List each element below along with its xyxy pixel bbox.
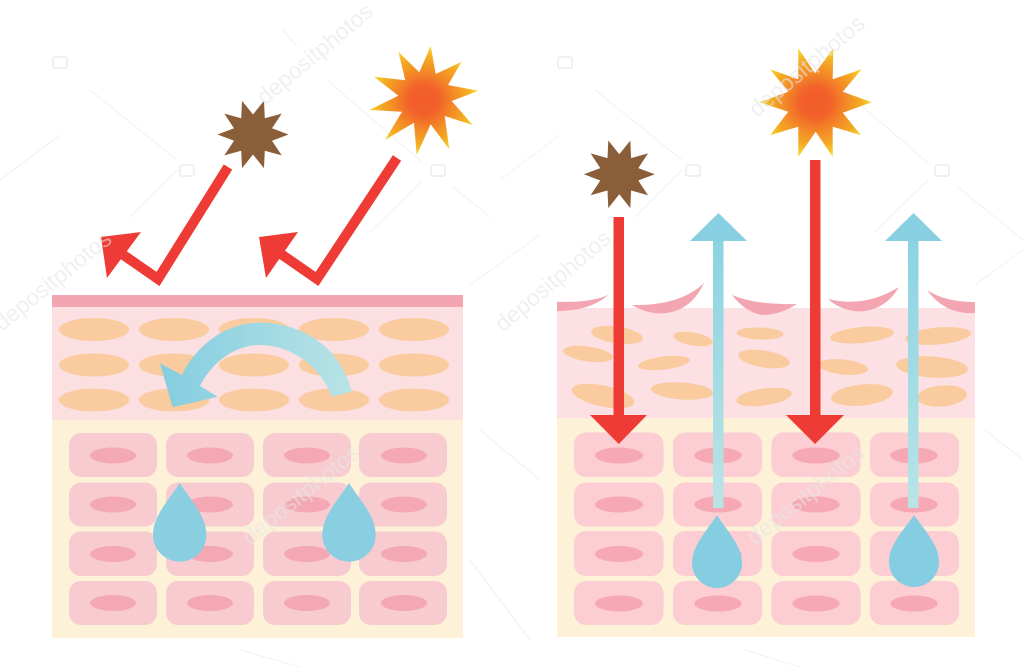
layer: left upper pink skin — [52, 305, 463, 421]
watermark text: depositphotos — [490, 225, 616, 337]
icon: sun burst right — [759, 48, 872, 157]
left orderly ellipse cells — [59, 318, 449, 412]
arrow: deflected red ray from sun — [259, 158, 397, 279]
watermark text — [0, 0, 870, 550]
layer: right cream lower skin — [557, 418, 975, 637]
icon: water drop right 2 — [889, 515, 939, 587]
icon: sun burst left — [369, 46, 478, 155]
watermark text: depositphotos — [237, 440, 364, 550]
panel: damaged skin, rays penetrating and moisture escaping — [557, 48, 975, 637]
arrow: blue moisture escaping 1 — [690, 213, 747, 508]
icon: water drop left 2 — [322, 483, 376, 562]
icon: water drop right 1 — [692, 515, 742, 588]
right rounded skin cells — [574, 432, 959, 625]
left cell nuclei — [90, 448, 427, 611]
watermark text: depositphotos — [744, 10, 870, 122]
arrow: curved moisture circulation arrow — [160, 323, 352, 407]
icon: brown dust star left — [218, 101, 288, 168]
icon: brown dust star right — [584, 140, 655, 208]
layer: left cream lower skin — [52, 420, 463, 638]
left rounded skin cells — [69, 433, 447, 625]
right disordered ellipse cells — [562, 323, 972, 413]
icon: water drop left 1 — [153, 483, 206, 562]
arrow: red ray penetrating from dust — [590, 217, 647, 444]
arrow: red ray penetrating from sun — [786, 160, 844, 444]
panel: healthy skin, rays and moisture retained — [52, 46, 478, 638]
watermark text: depositphotos — [252, 0, 378, 110]
layer: left surface band — [52, 295, 463, 307]
layer: right crescent surface flakes — [557, 283, 975, 315]
right cell nuclei — [595, 448, 938, 612]
watermark text: depositphotos — [742, 440, 869, 550]
arrow: deflected red ray from dust — [101, 167, 228, 279]
layer: right upper pink skin — [557, 308, 975, 419]
arrow: blue moisture escaping 2 — [885, 213, 942, 508]
